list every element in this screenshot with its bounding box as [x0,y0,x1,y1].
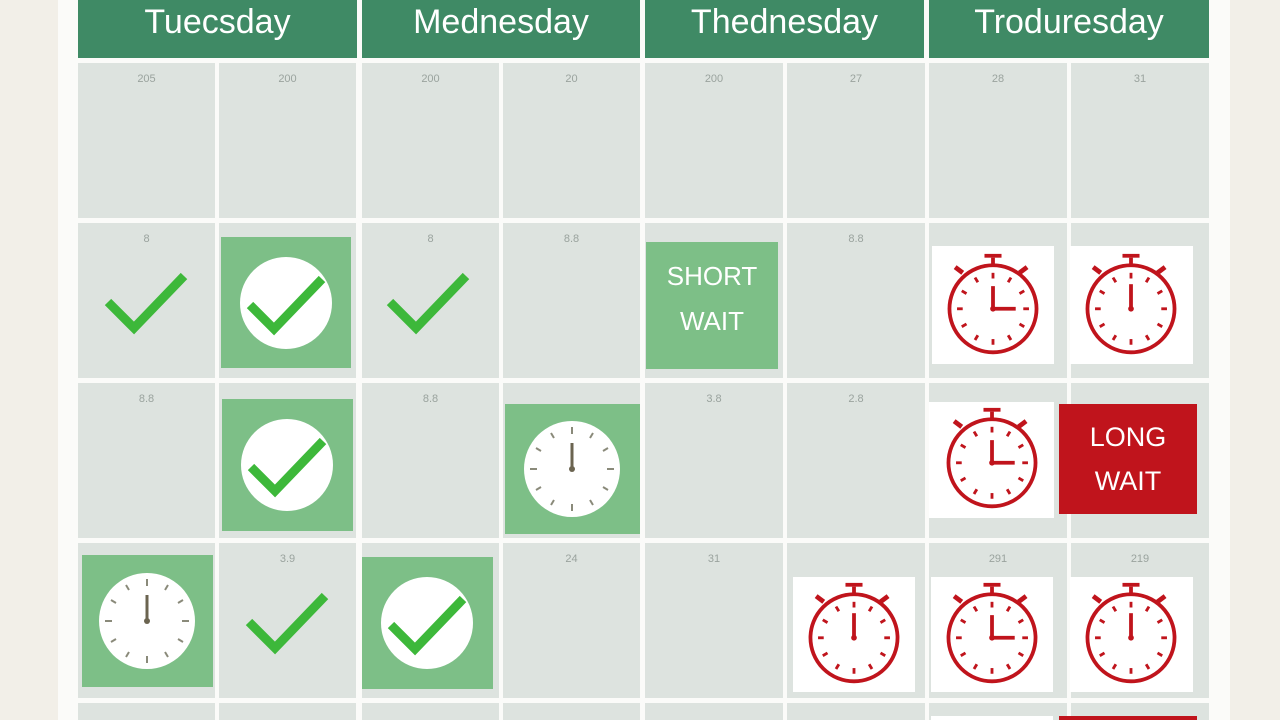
icon: check [386,272,470,334]
label: short wait: SHORT [667,261,757,291]
icon: check in green box [222,399,353,531]
icon: red clock [1070,577,1193,692]
text: 200 [705,73,723,85]
row 3: 8.8 [139,393,154,405]
text: 291 [989,553,1007,565]
icon: red clock [932,246,1054,364]
label: long wait: WAIT [1095,466,1161,496]
text: 200 [421,73,440,85]
text: 8.8 [423,393,438,405]
row 2: 8 [143,233,150,245]
header: Troduresday: Troduresday [974,3,1164,41]
header: Tuesday: Tuecsday [144,3,291,41]
text: 31 [708,553,720,565]
row 5 (partial) [78,703,215,720]
label: short wait: WAIT [680,306,744,336]
icon: check [246,592,328,654]
icon: white clock in green box [82,555,213,687]
row 4 [78,543,215,698]
text: 3.8 [706,393,722,405]
header: Mednesday: Mednesday [413,3,589,41]
icon: red clock [1070,246,1193,364]
icon: check [104,272,188,334]
icon: red clock [931,577,1053,692]
partial white box [931,716,1053,720]
header: Troduresday [929,0,1209,58]
row 1 [78,63,215,218]
icon: check in green box [362,557,493,689]
text: 8.8 [848,233,864,245]
header: Mednesday [362,0,640,58]
header: Tuesday [78,0,357,58]
text: 28 [992,73,1004,85]
partial red box [1059,716,1197,720]
text: 20 [565,73,578,85]
text: 8.8 [564,233,579,245]
header: Thednesday: Thednesday [691,3,878,41]
text: 200 [278,73,297,85]
icon: red clock [929,402,1054,518]
text: 24 [565,553,578,565]
row 2 [78,223,215,378]
icon: check in green box [221,237,351,368]
row 3 [78,383,215,538]
label: long wait: LONG [1090,422,1166,452]
icon: white clock in green box [505,404,640,534]
header: Thednesday [645,0,924,58]
text: 8 [427,233,434,245]
text: 3.9 [280,553,295,565]
icon: red clock [793,577,915,692]
label: long wait [1059,404,1197,514]
label: short wait [646,242,778,369]
text: 219 [1131,553,1149,565]
text: 27 [850,73,862,85]
text: 31 [1134,73,1146,85]
text: 2.8 [848,393,864,405]
row 1: 205 [137,73,156,85]
